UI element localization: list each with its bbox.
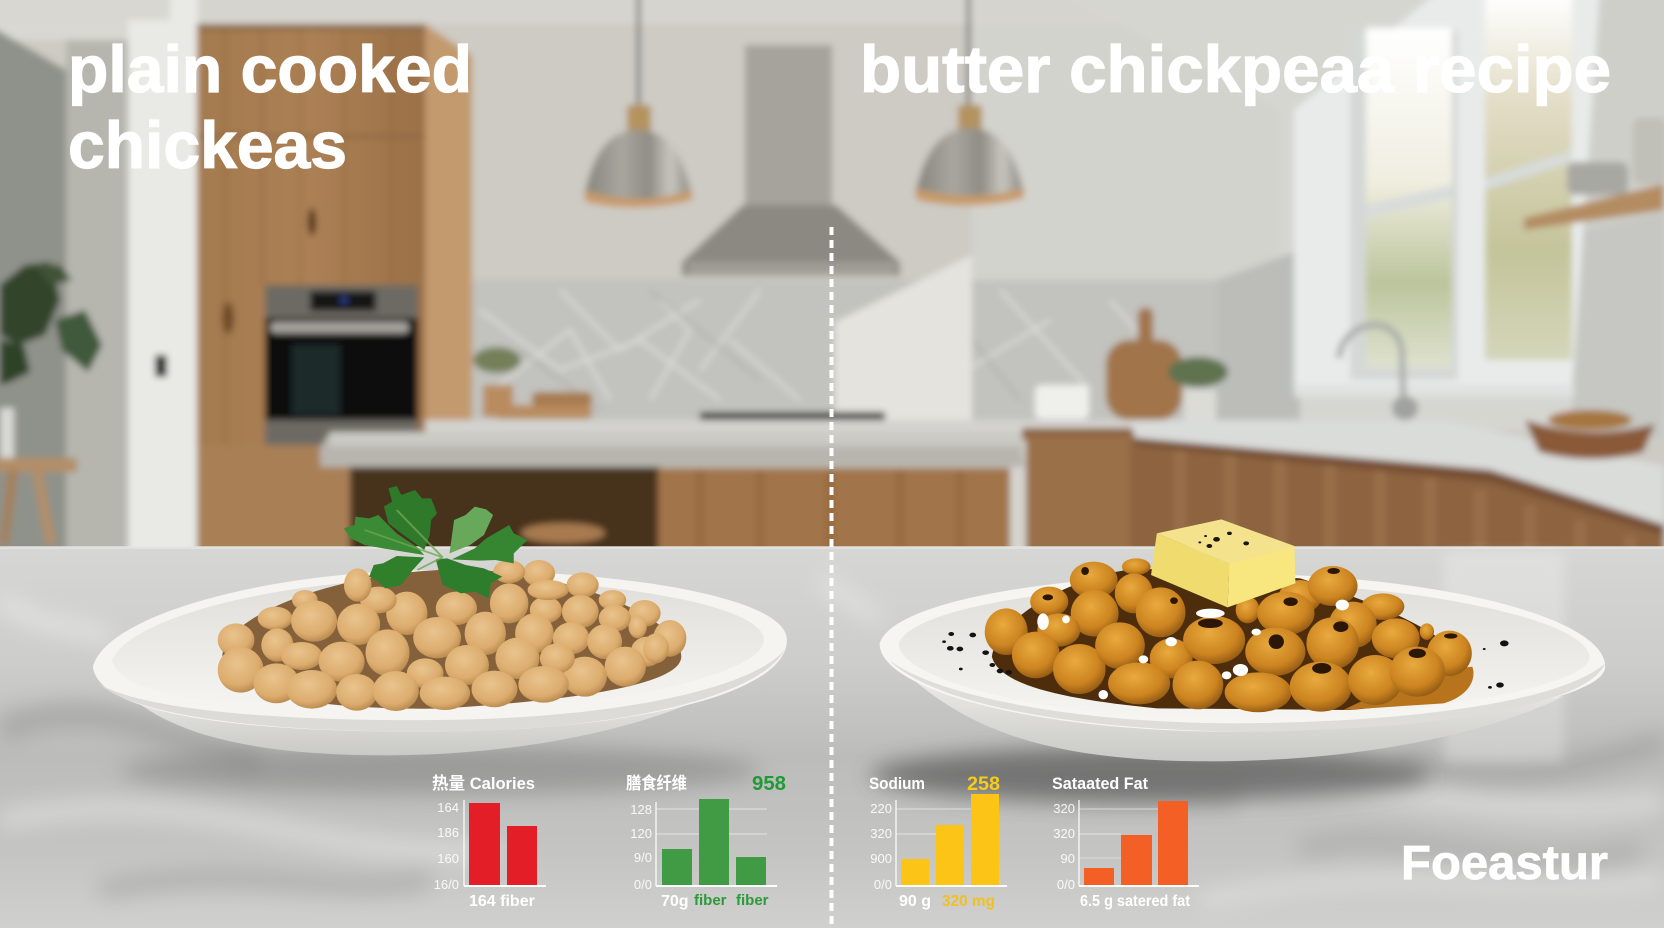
- chart: dietary fiber: 9/0: [634, 850, 652, 865]
- marble backsplash: [472, 212, 1664, 440]
- chart: saturated fat: [1052, 774, 1199, 910]
- chart: sodium: 220: [870, 801, 892, 816]
- chickpeas: plain: [218, 560, 686, 711]
- chart: calories: 热量 Calories: [432, 773, 535, 793]
- chart: saturated fat: 6.5 g satered fat: [1080, 893, 1191, 910]
- chart: dietary fiber: 70g: [661, 893, 689, 910]
- chart: dietary fiber: 膳食纤维: [626, 773, 687, 793]
- countertop props: [473, 308, 1228, 422]
- parsley: [344, 486, 528, 598]
- chickpeas: roasted with glaze: [942, 558, 1509, 712]
- heading: plain cooked chickeas: [68, 32, 472, 182]
- window: [1294, 0, 1600, 397]
- chart: dietary fiber: fiber: [736, 892, 769, 909]
- chart: saturated fat: 90: [1061, 851, 1075, 866]
- divider: dashed centre line: [830, 227, 834, 928]
- heading: plain cooked chickeas: chickeas: [68, 108, 347, 182]
- chart: dietary fiber: 958: [752, 773, 786, 795]
- plate: butter chickpeas: [880, 519, 1605, 761]
- shelf with bowls: [1524, 118, 1664, 230]
- chart: calories: 160: [437, 851, 459, 866]
- chart: dietary fiber: 0/0: [634, 877, 652, 892]
- chart: dietary fiber: 128: [630, 802, 652, 817]
- tall wood cabinet: [197, 24, 472, 554]
- chart: sodium: 900: [870, 851, 892, 866]
- back counters and cabinets: [425, 410, 1664, 560]
- kitchen background: [0, 0, 1664, 580]
- faucet: [1339, 325, 1418, 430]
- chart: saturated fat: 0/0: [1057, 877, 1075, 892]
- brand wordmark: Foeastur: [1401, 837, 1608, 890]
- chart: dietary fiber: [626, 773, 786, 910]
- chart: sodium: 0/0: [874, 877, 892, 892]
- chart: saturated fat: 320: [1053, 826, 1075, 841]
- chart: sodium: 320: [870, 826, 892, 841]
- marble foreground table: [0, 546, 1664, 928]
- chart: calories: 186: [437, 825, 459, 840]
- chart: sodium: 258: [967, 774, 1000, 795]
- island: [320, 432, 1026, 560]
- chart: sodium: 320 mg: [942, 893, 995, 910]
- butter pat: [1151, 519, 1295, 607]
- chart: sodium: [869, 774, 1007, 910]
- range hood: [682, 45, 900, 276]
- chart: dietary fiber: fiber: [694, 892, 727, 909]
- left plant, switch and stool: [0, 262, 167, 545]
- chart: saturated fat: Sataated Fat: [1052, 774, 1148, 793]
- plate: plain chickpeas: [93, 486, 787, 755]
- chart: dietary fiber: 120: [630, 826, 652, 841]
- chart: calories: [432, 773, 546, 910]
- heading: butter chickpeaa recipe: butter chickpeaa recipe: [860, 32, 1611, 106]
- chart: calories: 164: [437, 800, 459, 815]
- pendant lamp left: [584, 0, 692, 208]
- chart: sodium: Sodium: [869, 774, 925, 793]
- oven: [265, 285, 418, 445]
- chart: saturated fat: 320: [1053, 801, 1075, 816]
- heading: plain cooked chickeas: plain cooked: [68, 32, 472, 106]
- ceiling and side walls: [0, 0, 1664, 560]
- chart: sodium: 90 g: [899, 893, 931, 910]
- pendant lamp right: [915, 0, 1024, 206]
- chart: calories: 164 fiber: [469, 893, 535, 910]
- chart: calories: 16/0: [434, 877, 459, 892]
